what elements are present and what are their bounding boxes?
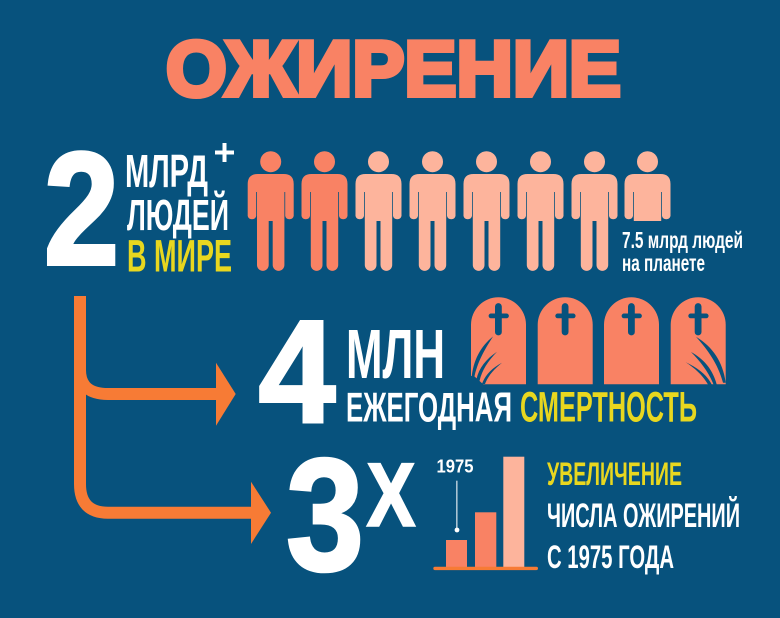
icon: partial person 8	[624, 151, 670, 221]
bar: 1975	[446, 540, 467, 568]
big number 2: 2	[44, 119, 119, 298]
label: million: МЛН	[346, 315, 445, 393]
icon: person 1	[248, 151, 294, 271]
icon: person 3	[356, 151, 402, 271]
icon: person 6	[518, 151, 564, 271]
big number 3: 3	[286, 425, 364, 604]
icon: tombstone 2	[538, 297, 593, 384]
pictogram: people row	[248, 151, 670, 271]
label: people: ЛЮДЕЙ	[127, 189, 229, 240]
arrows: branching connector	[80, 296, 271, 544]
tombstones	[470, 297, 726, 385]
arrow: to threefold growth	[80, 370, 271, 544]
section: threefold growth	[286, 425, 415, 604]
caption: 7.5 billion on the planet	[622, 227, 743, 276]
label: annual: ЕЖЕГОДНАЯ	[346, 384, 512, 431]
bar: middle	[475, 512, 496, 568]
icon: person 2	[302, 151, 348, 271]
arrow: to deaths	[80, 296, 236, 426]
text block: increase in obesity since 1975	[547, 456, 740, 575]
label: billion: МЛРД	[125, 145, 208, 197]
big number 4: 4	[258, 290, 336, 453]
icon: person 7	[572, 151, 618, 271]
multiplication X: X	[367, 444, 415, 544]
label: in the world: В МИРЕ	[127, 230, 232, 282]
bar: today	[503, 457, 524, 568]
label: since 1975: С 1975 ГОДА	[547, 539, 674, 575]
icon: person 5	[464, 151, 510, 271]
year marker	[455, 481, 459, 532]
plus sign	[215, 143, 234, 162]
icon: tombstone with grass left	[470, 297, 526, 385]
section: 4 million deaths	[258, 290, 697, 453]
bar chart: growth since 1975	[433, 455, 538, 570]
baseline	[433, 567, 538, 570]
caption: 7.5 billion on the planet: на планете	[622, 250, 705, 276]
icon: tombstone 3	[604, 297, 659, 384]
title: ОЖИРЕНИЕ	[166, 24, 621, 112]
icon: person 4	[410, 151, 456, 271]
label: increase: УВЕЛИЧЕНИЕ	[547, 456, 682, 492]
icon: tombstone with grass right	[671, 297, 726, 384]
section: 2 billion people	[44, 119, 234, 298]
year label: 1975	[436, 455, 474, 476]
